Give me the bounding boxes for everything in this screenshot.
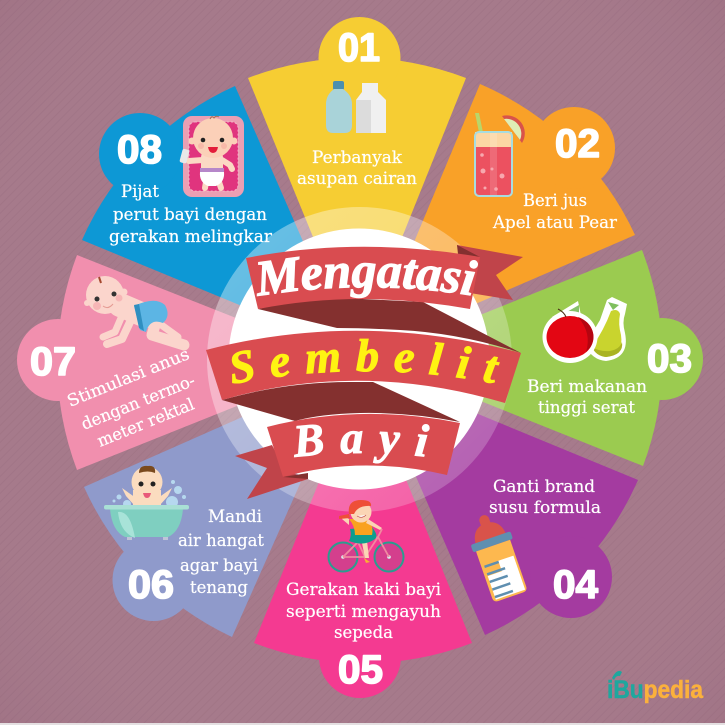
number 02: 02 <box>555 122 600 166</box>
number 07: 07 <box>30 340 76 384</box>
ribbon: bottom band <box>267 414 460 477</box>
petal 01 <box>248 17 466 347</box>
text 06: agar bayi <box>180 556 258 575</box>
ribbon: top tail <box>457 245 523 300</box>
text 08: Pijat <box>121 182 159 201</box>
number 05: 05 <box>338 648 383 692</box>
text 01: Perbanyak <box>312 148 403 167</box>
text 02 <box>492 191 617 232</box>
ribbon: bottom fold <box>283 473 308 479</box>
number 01: 01 <box>338 26 380 70</box>
text 08: gerakan melingkar <box>109 227 272 246</box>
icon: baby bottle <box>463 509 531 604</box>
text 06: air hangat <box>178 531 264 550</box>
petal 06 <box>84 369 351 637</box>
text 06: tenang <box>190 578 248 597</box>
heading: Bayi: Bayi <box>294 424 430 464</box>
panel: 04 Ganti brand susu formula <box>369 369 638 635</box>
petal 04 <box>369 369 638 635</box>
icon: juice glass with apple slice <box>475 113 525 196</box>
ribbon: fold between top and middle <box>258 298 521 353</box>
petal 05 <box>254 373 472 698</box>
text 07: meter rektal <box>94 395 197 451</box>
text 04: susu formula <box>489 498 601 517</box>
number 04: 04 <box>553 563 599 607</box>
text 01: asupan cairan <box>297 169 417 188</box>
text 08: perut bayi dengan <box>113 205 267 224</box>
panel: 06 Mandi air hangat <box>84 369 351 637</box>
text 07: dengan termo- <box>78 371 198 434</box>
text 05: Gerakan kaki bayi <box>286 580 441 599</box>
petal 02 <box>369 84 635 350</box>
icon: baby on pink mat <box>179 116 244 197</box>
number 08: 08 <box>117 128 162 172</box>
text 02: Apel atau Pear <box>492 213 617 232</box>
icon: apple and pear <box>542 297 627 363</box>
ribbon: top band <box>246 247 480 309</box>
text 04 <box>489 477 601 517</box>
panel: 08 Pijat perut bayi <box>82 86 351 351</box>
icon: girl riding a bicycle <box>328 500 404 572</box>
petal 08 <box>82 86 351 351</box>
text 05: seperti mengayuh <box>286 602 441 621</box>
text 01 <box>297 148 417 188</box>
ribbon: fold between middle and bottom <box>222 382 460 422</box>
text 02: Beri jus <box>523 191 587 210</box>
icon: crawling baby <box>84 276 184 345</box>
text 05: sepeda <box>334 623 393 642</box>
heading: Mengatasi: Mengatasi <box>256 256 478 298</box>
panel: 07 Stimulasi anus <box>17 255 347 470</box>
text 06 <box>178 507 264 597</box>
number 03: 03 <box>647 337 692 381</box>
panel: 03 Beri makanan tinggi serat <box>373 250 703 466</box>
text 03 <box>527 377 647 417</box>
text 03: Beri makanan <box>527 377 647 396</box>
text 08 <box>109 182 272 246</box>
text 07: Stimulasi anus <box>64 344 192 411</box>
logo: iBupedia: iBupedia <box>607 676 704 704</box>
text 06: Mandi <box>208 507 262 526</box>
ribbon: middle band <box>206 331 521 403</box>
white centre circle <box>228 228 490 490</box>
petal 07 <box>17 255 347 470</box>
text 07 <box>64 344 198 451</box>
text 05 <box>286 580 441 642</box>
ribbon: bottom tail <box>235 445 308 499</box>
heading: Sembelit: Sembelit <box>232 338 500 384</box>
ribbon banner <box>206 245 523 499</box>
translucent ring <box>207 207 512 512</box>
panel: 01 Perbanyak asupan cairan <box>248 17 466 347</box>
number 06: 06 <box>128 563 174 607</box>
text 03: tinggi serat <box>538 398 635 417</box>
icon: baby in bathtub <box>104 466 189 540</box>
text 04: Ganti brand <box>493 477 595 496</box>
ribbon: top fold <box>457 245 480 257</box>
petal 03 <box>373 250 703 466</box>
panel: 02 Beri jus <box>369 84 635 350</box>
panel: 05 Gerakan kaki bayi <box>254 373 472 698</box>
icon: water bottle and milk carton <box>326 81 386 133</box>
